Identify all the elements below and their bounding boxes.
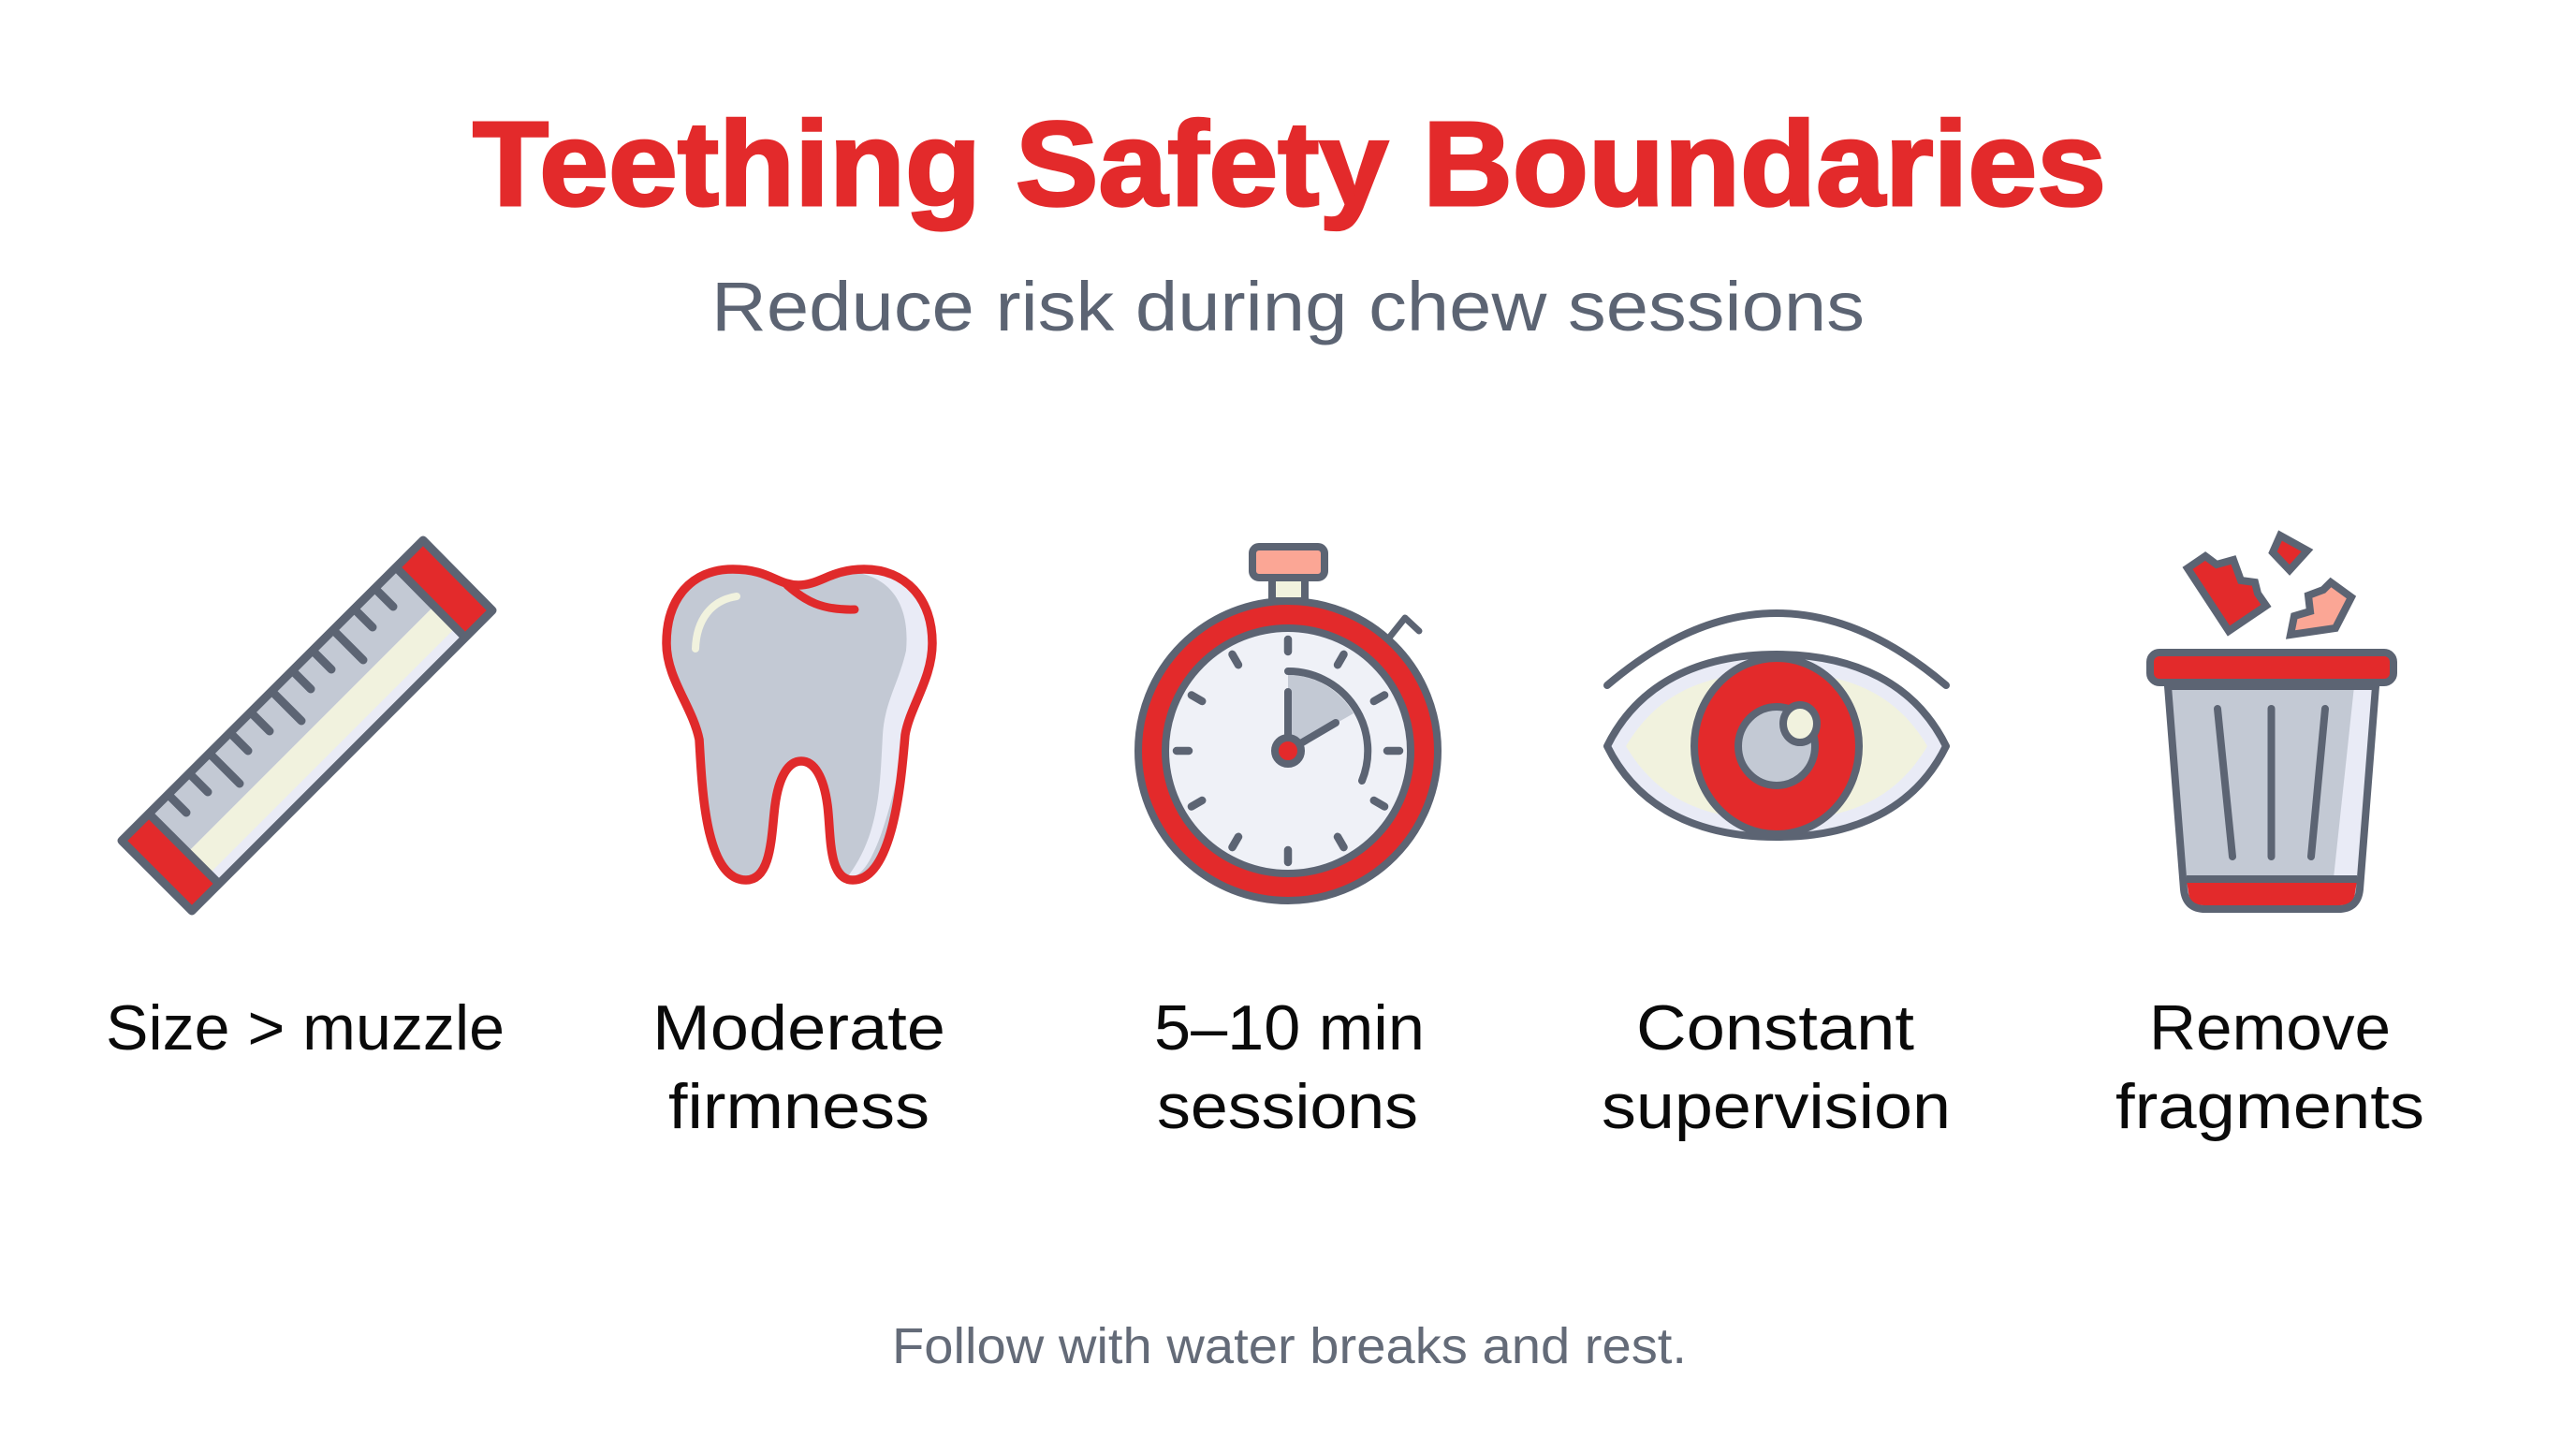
label: remove fragments: Remove bbox=[2149, 992, 2391, 1064]
title: Teething Safety Boundaries bbox=[473, 97, 2106, 231]
label: moderate firmness: Moderate bbox=[652, 992, 945, 1064]
icon: eye bbox=[1607, 613, 1946, 837]
label: moderate firmness bbox=[652, 992, 945, 1142]
label: size > muzzle: Size > muzzle bbox=[106, 992, 505, 1064]
subtitle: Reduce risk during chew sessions bbox=[711, 268, 1865, 345]
icon: stopwatch bbox=[1138, 547, 1438, 901]
icon: ruler bbox=[122, 540, 492, 911]
label: moderate firmness: firmness bbox=[668, 1071, 929, 1142]
label: remove fragments bbox=[2115, 992, 2424, 1142]
label: constant supervision: supervision bbox=[1602, 1071, 1951, 1142]
label: 5-10 min sessions: sessions bbox=[1157, 1071, 1418, 1142]
label: constant supervision bbox=[1602, 992, 1951, 1142]
label: 5-10 min sessions bbox=[1154, 992, 1425, 1142]
icon: tooth bbox=[666, 569, 932, 880]
label: constant supervision: Constant bbox=[1636, 992, 1914, 1064]
label: remove fragments: fragments bbox=[2115, 1071, 2424, 1142]
label: 5-10 min sessions: 5–10 min bbox=[1154, 992, 1425, 1064]
footer note: Follow with water breaks and rest. bbox=[892, 1318, 1687, 1374]
icon: trash bin with fragments bbox=[2150, 536, 2393, 909]
